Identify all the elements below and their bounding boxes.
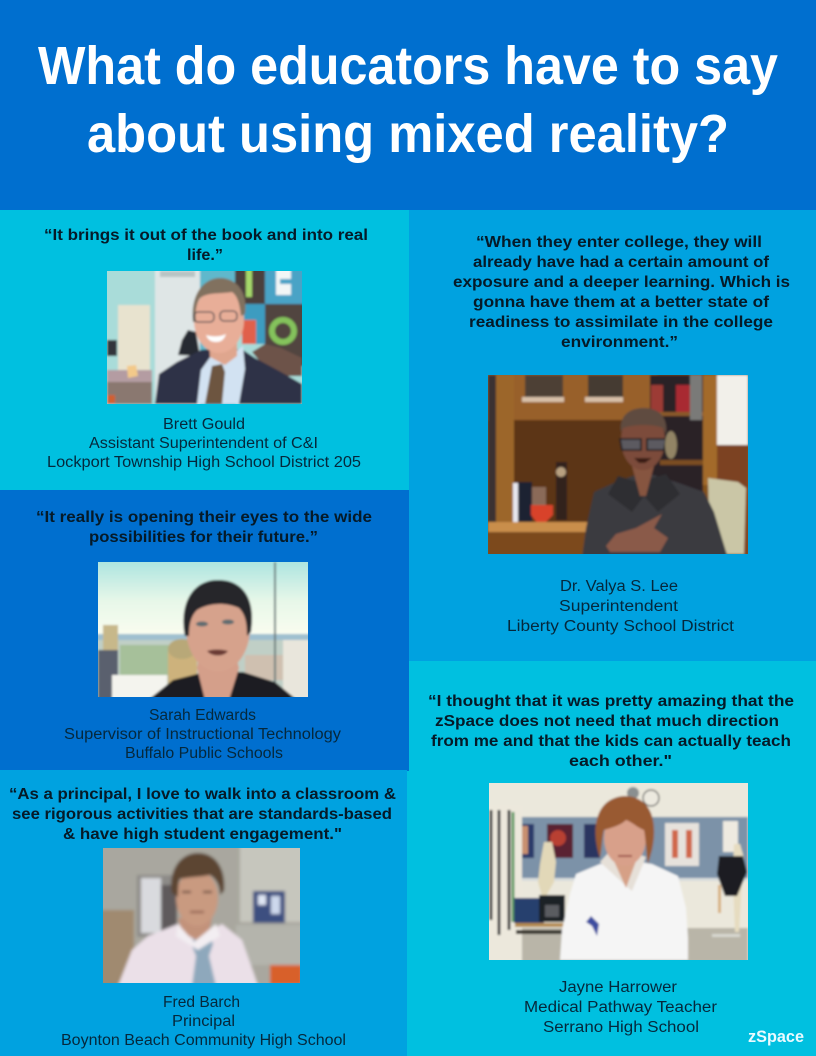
- attribution: Fred Barch: [61, 994, 346, 1049]
- quote: Dr. Valya S. Lee: [453, 234, 790, 351]
- photo: Sarah Edwards: [98, 562, 308, 697]
- attribution: Fred Barch: Principal: [172, 1013, 235, 1030]
- attribution: Fred Barch: Boynton Beach Community High School: [61, 1032, 346, 1049]
- photo: Jayne Harrower: [489, 783, 748, 960]
- header banner: [0, 0, 816, 210]
- quote: Brett Gould: “It brings it out of the book and into real: [44, 227, 368, 244]
- quote: Dr. Valya S. Lee: exposure and a deeper learning. Which is: [453, 274, 790, 291]
- photo: Brett Gould: [107, 271, 302, 404]
- quote: Dr. Valya S. Lee: gonna have them at a better state of: [473, 294, 770, 311]
- attribution: Sarah Edwards: Buffalo Public Schools: [125, 745, 283, 762]
- quote: Fred Barch: [9, 786, 396, 843]
- quote: Sarah Edwards: [36, 509, 372, 546]
- quote: Dr. Valya S. Lee: environment.”: [561, 334, 678, 351]
- attribution: Jayne Harrower: Serrano High School: [543, 1019, 699, 1036]
- panel: Sarah Edwards testimonial: [37, 510, 409, 771]
- attribution: Jayne Harrower: [524, 979, 717, 1036]
- quote: Fred Barch: see rigorous activities that are standards-based: [12, 806, 392, 823]
- quote: Sarah Edwards: possibilities for their future.”: [89, 529, 318, 546]
- quote: Brett Gould: life.”: [187, 247, 223, 264]
- quote: Sarah Edwards: “It really is opening their eyes to the wide: [36, 509, 372, 526]
- logo: zSpace: zSpace: [748, 1027, 804, 1046]
- quote: Jayne Harrower: “I thought that it was pretty amazing that the: [428, 693, 794, 710]
- quote: Fred Barch: “As a principal, I love to walk into a classroom &: [9, 786, 396, 803]
- title: [38, 36, 778, 164]
- attribution: Sarah Edwards: [64, 707, 341, 762]
- quote: Jayne Harrower: zSpace does not need that much direction: [435, 713, 779, 730]
- quote: Jayne Harrower: each other.": [569, 753, 672, 770]
- attribution: Sarah Edwards: Sarah Edwards: [149, 707, 256, 724]
- attribution: Brett Gould: [47, 416, 361, 471]
- attribution: Dr. Valya S. Lee: Liberty County School District: [507, 618, 735, 635]
- panel: Fred Barch testimonial: [0, 770, 407, 1056]
- quote: Dr. Valya S. Lee: already have had a certain amount of: [473, 254, 770, 271]
- attribution: Dr. Valya S. Lee: Dr. Valya S. Lee: [560, 578, 678, 595]
- panel: Dr. Valya S. Lee testimonial: [409, 210, 816, 661]
- title: about using mixed reality?: [87, 104, 729, 164]
- attribution: Brett Gould: Assistant Superintendent of C&I: [89, 435, 318, 452]
- attribution: Dr. Valya S. Lee: [507, 578, 735, 635]
- attribution: Dr. Valya S. Lee: Superintendent: [559, 598, 679, 615]
- panel: Brett Gould testimonial: [0, 210, 409, 490]
- quote: Dr. Valya S. Lee: “When they enter college, they will: [476, 234, 762, 251]
- attribution: Jayne Harrower: Medical Pathway Teacher: [524, 999, 717, 1016]
- attribution: Brett Gould: Lockport Township High School District 205: [47, 454, 361, 471]
- quote: Brett Gould: [44, 227, 368, 264]
- quote: Jayne Harrower: from me and that the kids can actually teach: [431, 733, 791, 750]
- attribution: Jayne Harrower: Jayne Harrower: [559, 979, 677, 996]
- title: What do educators have to say: [38, 36, 778, 96]
- quote: Jayne Harrower: [428, 693, 794, 770]
- attribution: Fred Barch: Fred Barch: [163, 994, 240, 1011]
- quote: Dr. Valya S. Lee: readiness to assimilate in the college: [469, 314, 773, 331]
- photo: Fred Barch: [103, 848, 300, 983]
- quote: Fred Barch: & have high student engagement.": [63, 826, 342, 843]
- attribution: Brett Gould: Brett Gould: [163, 416, 245, 433]
- panel: Jayne Harrower testimonial: [407, 661, 816, 1056]
- photo: Dr. Valya S. Lee: [488, 375, 748, 554]
- attribution: Sarah Edwards: Supervisor of Instructional Technology: [64, 726, 341, 743]
